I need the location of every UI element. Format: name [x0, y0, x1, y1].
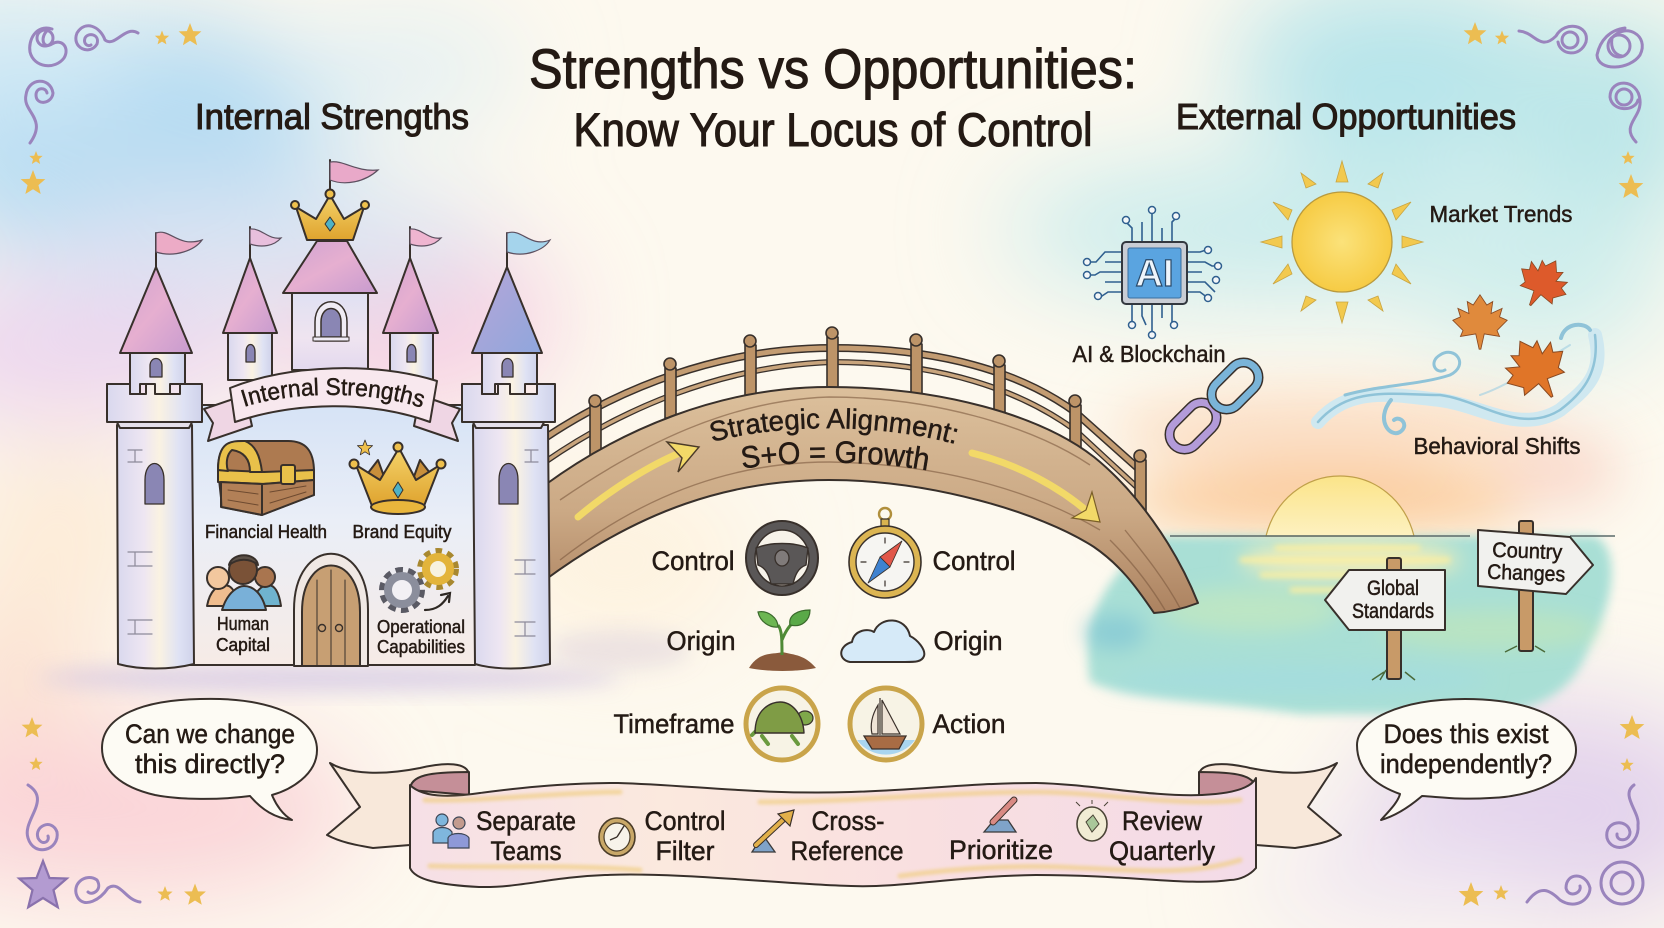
label: AI & blockchain: AI & Blockchain [1072, 341, 1226, 367]
label: behavioral shifts: Behavioral Shifts [1414, 433, 1580, 459]
label: operational capabilities: Operational [377, 617, 465, 637]
flags [156, 162, 550, 254]
right tower [462, 267, 555, 668]
icon: lever [984, 800, 1016, 832]
label: prioritize: Prioritize [949, 835, 1053, 865]
icon: gears [383, 552, 455, 610]
comparison: action label: Action [932, 709, 1006, 739]
corner flourish: top right [1464, 22, 1643, 198]
icon: chain links [1163, 356, 1265, 456]
signpost: country changes [1478, 521, 1593, 652]
label: market trends: Market Trends [1430, 201, 1572, 227]
icon: cloud [841, 620, 924, 662]
bridge [549, 289, 1238, 632]
signpost: country changes: Changes [1487, 561, 1566, 586]
label: brand equity: Brand Equity [352, 522, 452, 542]
signpost: global standards [1325, 558, 1445, 680]
icon: review dial [1076, 800, 1108, 841]
label: review quarterly: Quarterly [1109, 836, 1215, 866]
corner flourish: bottom left [19, 717, 206, 907]
icon: two people [433, 814, 469, 848]
sunset over horizon [1170, 476, 1615, 590]
speech bubble: internal question [102, 699, 317, 820]
castle [106, 159, 556, 670]
comparison: origin right label: Origin [934, 626, 1002, 656]
comparison: control left label: Control [652, 546, 734, 576]
right side: opportunities [1072, 161, 1615, 680]
door [294, 554, 368, 666]
icon: people [207, 555, 281, 610]
castle banner: Internal Strengths [240, 378, 424, 407]
label: review quarterly: Review [1122, 806, 1202, 836]
icon: clock [599, 818, 635, 856]
label: operational capabilities [377, 617, 465, 657]
heading: internal strengths: Internal Strengths [195, 96, 469, 137]
icon: gold crown [350, 440, 446, 514]
speech bubble: internal question: Can we change [125, 719, 295, 749]
inner turrets [156, 160, 507, 380]
comparison: control right label: Control [932, 546, 1016, 576]
speech bubble: external question: Does this exist [1384, 719, 1549, 749]
arrow: right yellow [972, 453, 1100, 522]
label: separate teams [476, 806, 576, 866]
speech bubble: external question [1357, 699, 1576, 820]
icon: sailboat [850, 688, 922, 760]
label: control filter: Filter [656, 836, 715, 866]
label: cross-reference: Reference [790, 836, 904, 866]
bridge deck [545, 387, 1198, 613]
bridge posts and rails [545, 327, 1146, 525]
bridge formula: S+O = Growth [742, 441, 928, 470]
crown on keep [291, 190, 369, 240]
label: control filter: Control [644, 806, 726, 836]
heading: external opportunities: External Opportunities [1176, 96, 1516, 137]
icon: rising arrow [752, 810, 794, 852]
corner flourish: top left [21, 23, 201, 194]
label: cross-reference: Cross- [812, 806, 884, 836]
label: financial health: Financial Health [205, 522, 327, 542]
label: cross-reference [790, 806, 904, 866]
bridge label: Strategic Alignment: [710, 408, 958, 444]
ribbon tails [327, 763, 1341, 848]
icon: AI chip: AI [1136, 253, 1174, 295]
icon: sprout [749, 610, 816, 671]
main title: Strengths vs Opportunities: [529, 37, 1137, 100]
icon: steering wheel [746, 521, 818, 595]
ribbon body [410, 778, 1256, 887]
label: human capital [216, 614, 270, 655]
label: control filter [644, 806, 726, 866]
label: operational capabilities: Capabilities [377, 637, 465, 657]
bottom ribbon [327, 763, 1341, 887]
label: human capital: Human [217, 614, 269, 634]
arrow: left yellow [578, 442, 699, 517]
signpost: country changes: Country [1492, 539, 1563, 564]
main title [529, 37, 1137, 156]
castle banner [203, 367, 461, 442]
signpost: global standards: Global [1367, 577, 1419, 600]
comparison: origin left label: Origin [666, 626, 736, 656]
label: human capital: Capital [216, 635, 270, 655]
comparison: timeframe label: Timeframe [614, 709, 734, 739]
main title: Know Your Locus of Control [574, 103, 1092, 156]
icon: wind swirls [1318, 325, 1598, 433]
icon: maple leaves [1453, 248, 1580, 413]
corner flourish: bottom right [1459, 715, 1644, 906]
icon: compass [849, 508, 921, 598]
speech bubble: internal question: this directly? [135, 749, 285, 779]
label: separate teams: Teams [490, 836, 562, 866]
icon: turtle [746, 688, 818, 760]
icon: sun [1261, 161, 1423, 323]
left tower [107, 267, 202, 668]
label: review quarterly [1109, 806, 1215, 866]
icon: AI chip [1084, 206, 1222, 338]
sea [1088, 536, 1612, 714]
icon: treasure chest [218, 441, 314, 515]
label: separate teams: Separate [476, 806, 576, 836]
castle wall [190, 405, 475, 665]
centre keep [283, 241, 377, 370]
signpost: global standards: Standards [1352, 600, 1434, 623]
speech bubble: external question: independently? [1380, 749, 1552, 779]
